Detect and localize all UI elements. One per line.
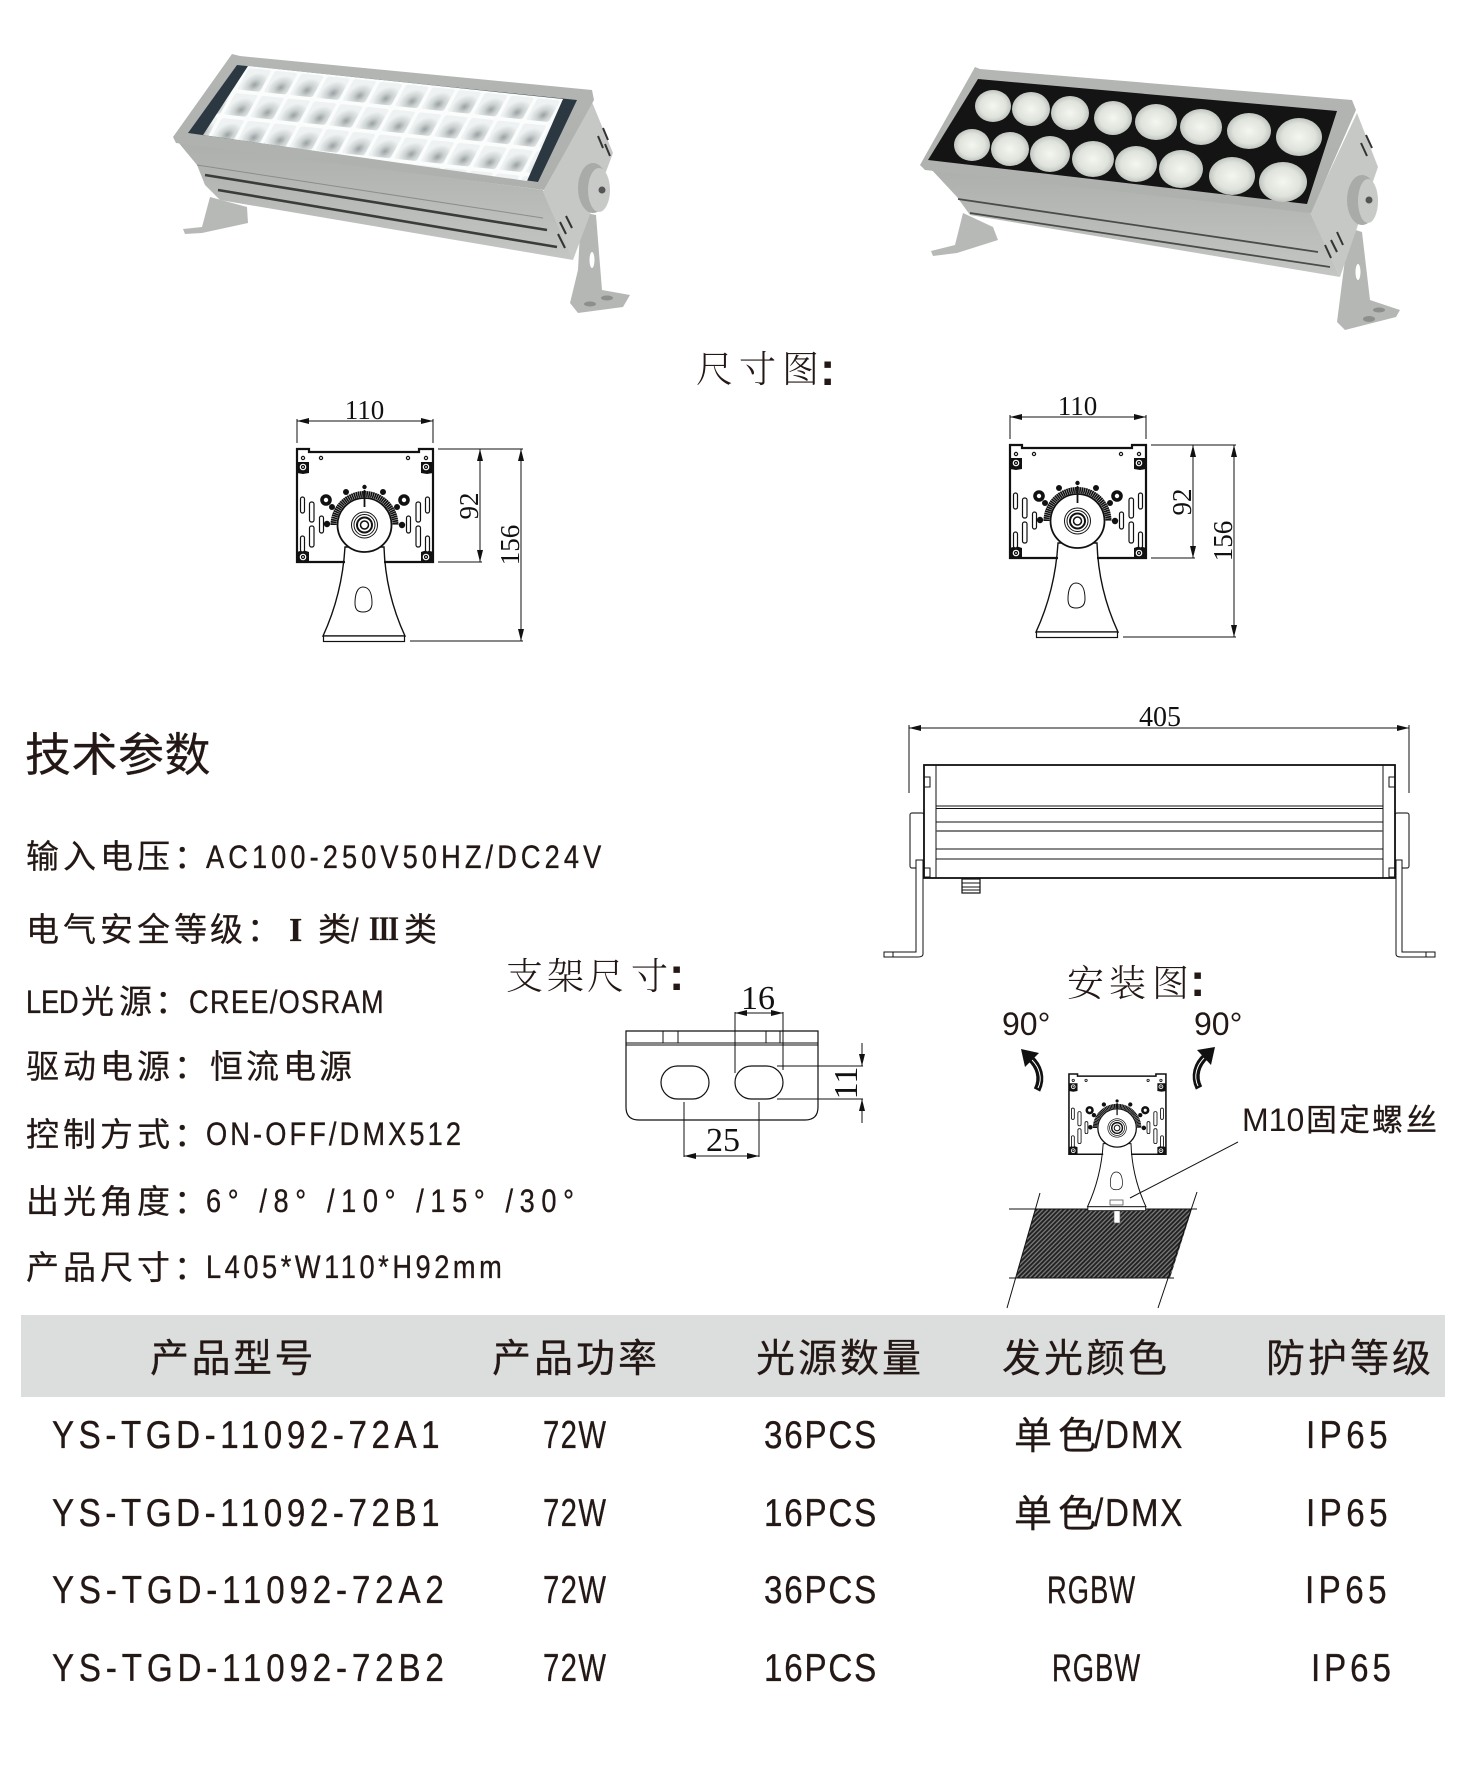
- table row 1: IP65: [1306, 1412, 1388, 1457]
- column header: protection: 防护等级: [1266, 1338, 1431, 1381]
- spec: control mode: ON-OFF/DMX512: [206, 1117, 461, 1153]
- spec: beam angle: 出光角度：: [26, 1183, 207, 1220]
- side dimension drawing left: [297, 395, 525, 642]
- spec: beam angle: [26, 1183, 574, 1220]
- table row 1: 72W: [543, 1414, 606, 1457]
- spec: product size: L405*W110*H92mm: [206, 1250, 502, 1286]
- table row 3: YS-TGD-11092-72A2: [52, 1567, 444, 1612]
- table row 3: [52, 1567, 1387, 1612]
- table row 1: YS-TGD-11092-72A1: [52, 1412, 440, 1457]
- bracket dimension drawing: [626, 980, 865, 1159]
- spec: LED source: CREE/OSRAM: [189, 985, 384, 1021]
- side dimension drawing left: 92: [454, 492, 484, 520]
- heading: dimension drawings: 尺寸图: [696, 339, 819, 393]
- column header: color: 发光颜色: [1002, 1338, 1167, 1381]
- table row 4: IP65: [1311, 1645, 1391, 1690]
- bracket dimension drawing: 11: [828, 1067, 865, 1099]
- table row 2: IP65: [1306, 1490, 1388, 1535]
- table row 2: /DMX: [1094, 1490, 1182, 1535]
- spec: electrical safety class: /: [351, 913, 359, 949]
- icon: left rotation arrow: [1021, 1049, 1040, 1090]
- bracket dimension drawing: 16: [741, 980, 775, 1017]
- heading: installation diagram: :: [1190, 954, 1205, 1006]
- spec: control mode: [26, 1116, 461, 1153]
- installation diagram: [1002, 1006, 1437, 1308]
- table row 2: [52, 1490, 1388, 1536]
- table row 2: 单色: [1014, 1494, 1096, 1536]
- table row 3: 72W: [543, 1569, 606, 1612]
- spec: electrical safety class: 类: [318, 911, 351, 948]
- heading: bracket size: :: [669, 948, 684, 1000]
- table row 4: YS-TGD-11092-72B2: [52, 1645, 444, 1690]
- spec: control mode: 控制方式：: [26, 1116, 207, 1153]
- leader line: [1130, 1142, 1238, 1198]
- heading: installation diagram: 安装图: [1067, 953, 1189, 1007]
- front view dimension drawing: [884, 702, 1435, 957]
- table row 3: IP65: [1305, 1567, 1387, 1612]
- table row 3: 36PCS: [764, 1567, 876, 1612]
- side dimension drawing left: 156: [495, 525, 525, 565]
- spec: electrical safety class: [26, 905, 437, 949]
- product photo: 16-lens wall washer: [920, 67, 1400, 330]
- spec: electrical safety class: 电气安全等级：: [26, 911, 280, 948]
- spec: product size: 产品尺寸：: [26, 1249, 207, 1286]
- spec: input voltage: 输入电压：: [26, 838, 207, 875]
- table row 4: 16PCS: [764, 1645, 876, 1690]
- column header: light source count: 光源数量: [756, 1338, 921, 1381]
- front view dimension drawing: 405: [1139, 702, 1181, 733]
- table row 4: 72W: [543, 1647, 606, 1690]
- table header band: [21, 1315, 1445, 1397]
- spec: electrical safety class: 类: [404, 911, 437, 948]
- label: M10 fixing screw: 固定螺丝: [1306, 1103, 1437, 1138]
- side dimension drawing right: 92: [1167, 488, 1197, 516]
- table row 2: YS-TGD-11092-72B1: [52, 1490, 440, 1535]
- label: M10 fixing screw: M10: [1242, 1102, 1304, 1138]
- ground block: [1007, 1192, 1197, 1308]
- table row 3: RGBW: [1047, 1569, 1135, 1612]
- spec: LED source: LED: [26, 985, 79, 1021]
- table row 1: [52, 1412, 1388, 1458]
- product photo: 36-lens wall washer: [173, 54, 630, 313]
- spec: input voltage: AC100-250V50HZ/DC24V: [206, 840, 601, 876]
- table row 1: 单色: [1014, 1416, 1096, 1458]
- heading: bracket size: 支架尺寸: [506, 946, 668, 1000]
- spec: electrical safety class: I: [289, 912, 302, 949]
- table row 2: 72W: [543, 1492, 606, 1535]
- label: left rotation: 90°: [1002, 1006, 1050, 1042]
- table row 4: RGBW: [1052, 1647, 1140, 1690]
- table row 1: /DMX: [1094, 1412, 1182, 1457]
- bracket dimension drawing: 25: [706, 1122, 740, 1159]
- table row 4: [52, 1645, 1391, 1690]
- side dimension drawing right: 156: [1208, 521, 1238, 561]
- side dimension drawing right: 110: [1058, 391, 1097, 421]
- table row 2: 16PCS: [764, 1490, 876, 1535]
- label: M10 fixing screw: [1242, 1102, 1437, 1138]
- icon: right rotation arrow: [1196, 1047, 1215, 1088]
- spec: beam angle: 6° /8° /10° /15° /30°: [206, 1184, 574, 1220]
- side dimension drawing right: [1010, 391, 1238, 638]
- spec: LED source: [26, 983, 384, 1021]
- heading: dimension drawings: :: [820, 343, 835, 395]
- spec: electrical safety class: Ⅲ: [369, 905, 399, 949]
- table row 1: 36PCS: [764, 1412, 876, 1457]
- heading: technical parameters: 技术参数: [25, 729, 210, 781]
- side dimension drawing left: 110: [345, 395, 384, 425]
- spec: product size: [26, 1249, 502, 1286]
- spec: LED source: 光源：: [81, 983, 188, 1020]
- spec: input voltage: [26, 838, 601, 876]
- label: right rotation: 90°: [1194, 1006, 1242, 1042]
- column header: model: 产品型号: [150, 1338, 314, 1381]
- spec: driver: 驱动电源：恒流电源: [26, 1048, 352, 1085]
- mounted fixture: [1069, 1074, 1166, 1211]
- column header: power: 产品功率: [492, 1338, 657, 1381]
